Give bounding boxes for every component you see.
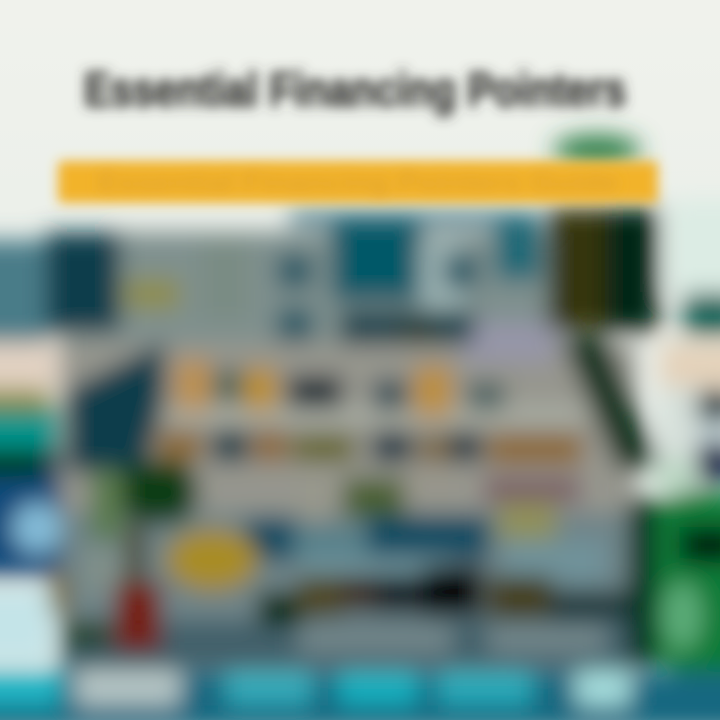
building body	[60, 232, 635, 670]
bottom water strip	[0, 670, 720, 720]
banner text: Essential Financing Pointers Guide	[98, 167, 618, 197]
left scenery	[0, 240, 90, 662]
yellow shrub	[166, 529, 258, 591]
upper windows	[46, 212, 540, 344]
lower band	[246, 502, 630, 652]
middle windows	[158, 360, 582, 519]
banner	[58, 161, 658, 203]
left teal awning	[68, 342, 164, 472]
right scenery	[650, 200, 720, 720]
right palm tree	[548, 135, 660, 666]
left palm tree	[50, 460, 198, 651]
